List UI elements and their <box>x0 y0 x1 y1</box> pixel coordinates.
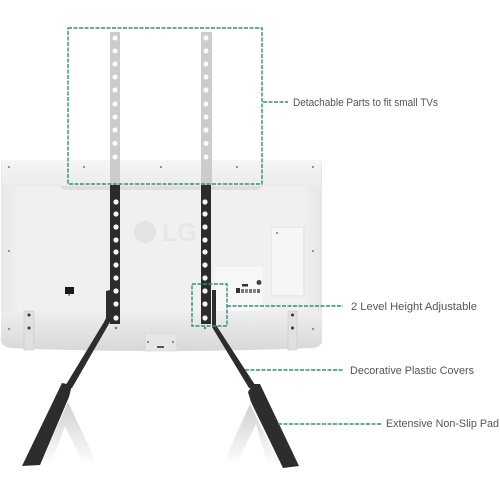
TV back panel <box>1 160 322 351</box>
screws <box>8 166 314 343</box>
right leg <box>212 290 299 468</box>
left upright: detachable grey part <box>110 32 120 185</box>
shadow: left foot <box>40 402 98 466</box>
LG logo <box>134 219 197 247</box>
left foot pad <box>22 383 72 466</box>
callout: plastic covers: Decorative Plastic Covers <box>350 365 474 377</box>
right upright: detachable grey part <box>201 32 212 185</box>
shadow: right foot <box>222 404 280 466</box>
callout: height adjustable: 2 Level Height Adjustable <box>351 301 477 313</box>
callout: non-slip pad: Extensive Non-Slip Pad <box>386 418 499 430</box>
rear compartment <box>271 227 305 297</box>
right foot pad <box>248 384 299 468</box>
side cover right <box>288 311 297 350</box>
power socket <box>65 287 74 294</box>
callout: detachable parts: Detachable Parts to fit small TVs <box>293 97 438 109</box>
LG logo: LG <box>162 219 197 247</box>
centre cover <box>145 333 177 351</box>
left leg <box>22 290 110 466</box>
side cover left <box>24 311 34 350</box>
right upright: black part <box>201 185 211 324</box>
ports panel <box>215 267 263 311</box>
callout: height adjustable <box>192 284 477 326</box>
left upright: black part <box>110 185 120 324</box>
callout: detachable parts <box>68 28 438 184</box>
